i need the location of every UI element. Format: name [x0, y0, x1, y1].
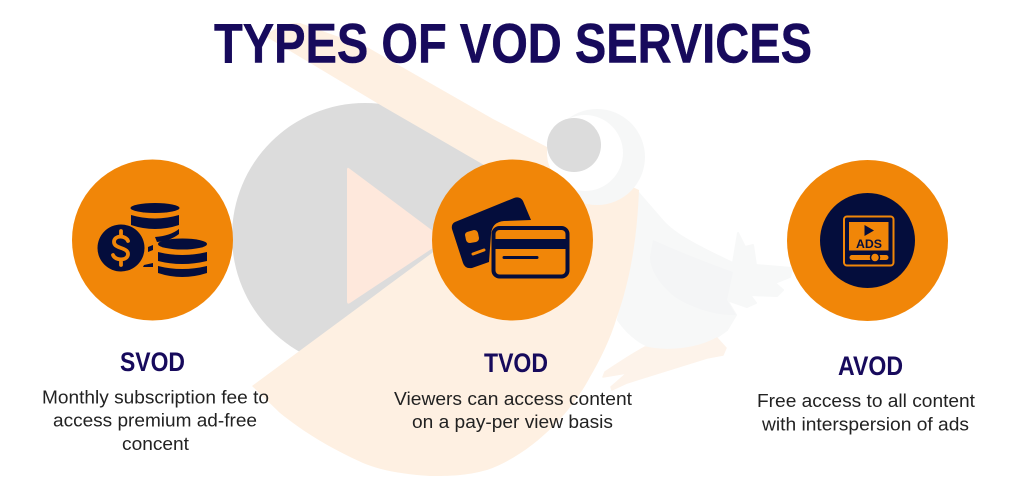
AVOD orange circle: [787, 160, 948, 321]
AVOD description: with interspersion of ads: [761, 414, 969, 434]
bird wing: [650, 240, 736, 315]
panel: SVOD: [42, 160, 269, 454]
icon: ads video screen: ADS: [856, 237, 882, 251]
TVOD orange circle: [432, 160, 593, 320]
title: TYPES OF VOD SERVICES: [214, 12, 812, 74]
TVOD description: [394, 389, 632, 432]
icon: credit cards: [452, 197, 568, 276]
SVOD description: Monthly subscription fee to: [42, 388, 269, 408]
SVOD description: [42, 388, 269, 454]
bill and neck shape: [252, 23, 639, 476]
SVOD orange circle: [72, 160, 233, 320]
icon: coins with dollar: [98, 203, 207, 277]
TVOD description: on a pay-per view basis: [412, 412, 613, 432]
background watermark: bird with play button: [232, 23, 792, 476]
SVOD description: concent: [122, 434, 189, 454]
play triangle: [347, 168, 445, 304]
SVOD description: access premium ad-free: [53, 410, 257, 430]
panel: TVOD: [394, 160, 632, 432]
TVOD heading: TVOD: [484, 348, 548, 378]
grey play circle: [232, 103, 500, 369]
AVOD description: [757, 391, 975, 434]
AVOD description: Free access to all content: [757, 391, 975, 411]
SVOD heading: SVOD: [120, 347, 185, 377]
AVOD heading: AVOD: [838, 351, 903, 381]
bird eye: [547, 118, 601, 172]
panel: AVOD: [757, 160, 975, 434]
head highlight: [547, 115, 623, 191]
bird head: [549, 109, 645, 205]
bird body and tail: [618, 190, 792, 351]
bird feet: [603, 338, 726, 390]
icon: ads video screen: [820, 193, 915, 288]
TVOD description: Viewers can access content: [394, 389, 632, 409]
